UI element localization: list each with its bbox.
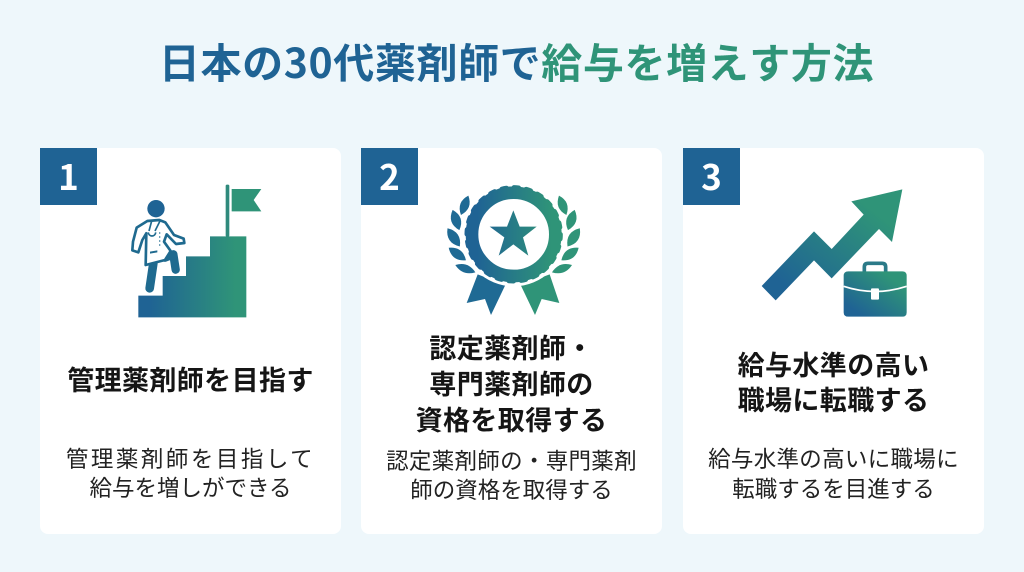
heading: [416, 327, 607, 438]
heading: 専門薬剤師の: [429, 363, 594, 402]
number badge 3: 3: [701, 150, 722, 201]
heading: 給与水準の高い: [738, 344, 929, 383]
icon: doctor climbing stairs to flag: [131, 184, 262, 318]
heading: 職場に転職する: [738, 379, 929, 418]
panel: card 1: [40, 148, 341, 534]
number badge 1: [40, 148, 97, 205]
number badge 2: 2: [379, 150, 400, 201]
heading: 認定薬剤師・: [429, 327, 594, 366]
description: 転職するを目進する: [732, 472, 935, 504]
icon: rising arrow and briefcase: [762, 189, 907, 317]
number badge 3: [683, 148, 740, 205]
panel: card 3: [683, 148, 984, 534]
description: [708, 442, 959, 504]
description: 認定薬剤師の・専門薬剤: [386, 444, 637, 476]
description: 給与を増しができる: [89, 471, 292, 503]
description: 管理薬剤師を目指して: [66, 442, 315, 474]
heading: [738, 344, 929, 418]
number badge 2: [361, 148, 418, 205]
number badge 1: 1: [58, 150, 79, 201]
panel: card 2: [361, 148, 662, 534]
description: [66, 442, 315, 503]
description: 師の資格を取得する: [410, 473, 613, 505]
description: 給与水準の高いに職場に: [708, 442, 959, 474]
description: [386, 444, 637, 505]
title: 日本の30代薬剤師で給与を増えす方法: [159, 30, 874, 90]
heading: 資格を取得する: [416, 399, 607, 438]
heading: 管理薬剤師を目指す: [67, 359, 314, 398]
icon: award rosette with laurel: [447, 185, 580, 315]
